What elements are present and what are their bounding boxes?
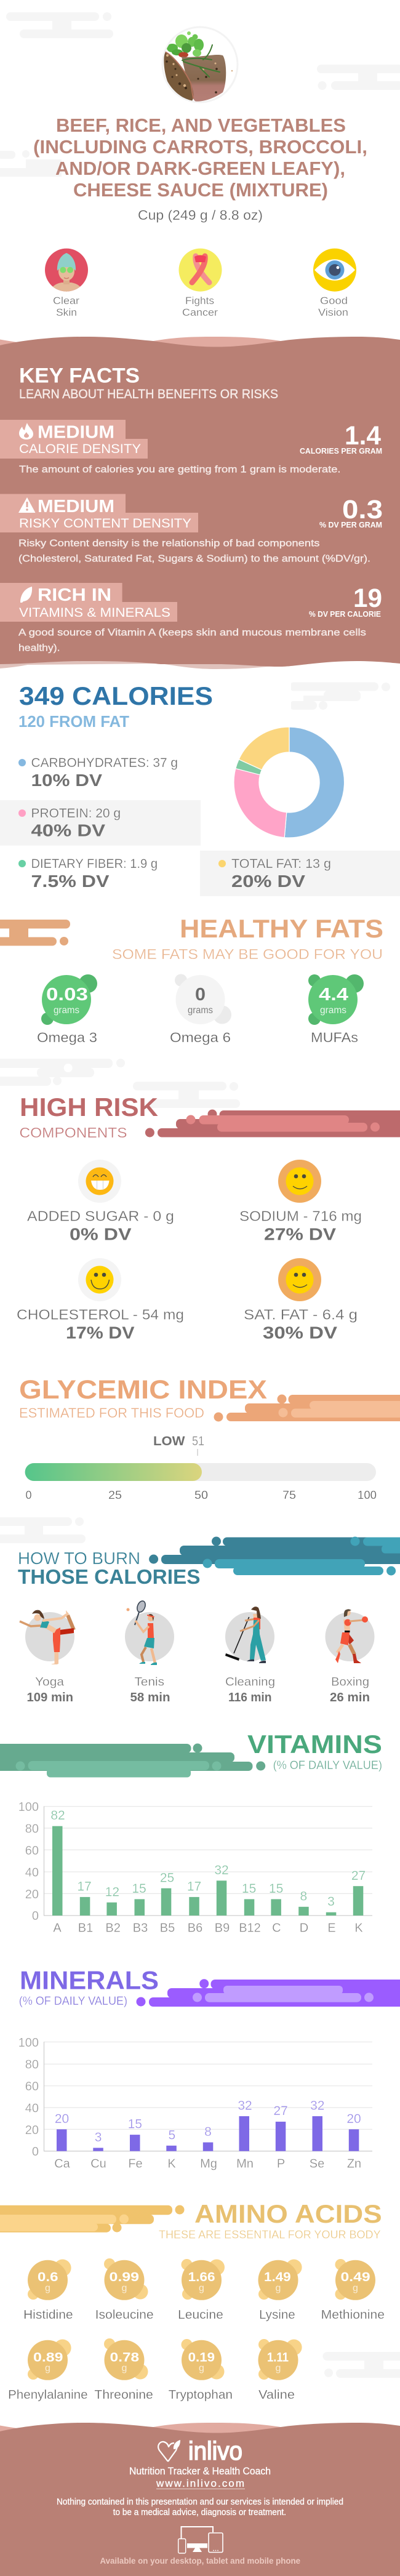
glycemic index gauge: LOW: [153, 1434, 185, 1448]
fights cancer label: [182, 295, 218, 318]
bar chart: minerals: 40: [25, 2101, 39, 2115]
amino acid: tryptophan: 0.19: [188, 2350, 215, 2364]
fat: omega 3: [37, 974, 97, 1045]
bar chart: minerals: 100: [18, 2036, 39, 2050]
macro: total fat: 20% DV: [231, 872, 305, 891]
bar chart: vitamins: 15: [269, 1882, 283, 1896]
glycemic index gauge: 100: [358, 1489, 377, 1501]
amino acid: phenylalanine: [8, 2339, 88, 2402]
title: AND/OR DARK-GREEN LEAFY),: [55, 158, 345, 179]
risk: cholesterol: CHOLESTEROL - 54 mg: [17, 1307, 184, 1323]
bar chart: vitamins: B12: [239, 1922, 261, 1935]
panel: key facts: [0, 337, 400, 669]
good vision label: [318, 295, 348, 318]
heading: high risk components: HIGH RISK: [20, 1093, 158, 1121]
bar chart: vitamins: B6: [188, 1922, 202, 1935]
activity label: yoga: Yoga: [35, 1676, 64, 1689]
fat: mufas: MUFAs: [311, 1030, 358, 1045]
bar chart: minerals: 80: [25, 2058, 39, 2072]
risk: sodium: SODIUM - 716 mg: [239, 1208, 362, 1224]
donut chart: macronutrients: [234, 727, 345, 838]
key facts heading: KEY FACTS: [19, 364, 140, 387]
logo wordmark: inlivo: [188, 2436, 242, 2465]
bar chart: vitamins: E: [327, 1922, 336, 1935]
macro: protein: 40% DV: [31, 821, 105, 840]
glycemic index gauge: [25, 1434, 377, 1501]
bar chart: minerals: P: [277, 2157, 285, 2171]
fact: risky content density: [0, 494, 383, 564]
bar chart: minerals: 60: [25, 2080, 39, 2093]
bar chart: minerals: 15: [128, 2117, 142, 2131]
heading: healthy fats: HEALTHY FATS: [180, 914, 383, 943]
bar chart: vitamins: 80: [25, 1822, 39, 1836]
amino acid: phenylalanine: 0.89: [33, 2350, 63, 2364]
bar chart: vitamins: 32: [214, 1863, 229, 1877]
amino acid: phenylalanine: Phenylalanine: [8, 2388, 88, 2402]
bar chart: vitamins: 60: [25, 1844, 39, 1858]
glycemic index gauge: 25: [108, 1489, 122, 1501]
background clouds: header: [0, 12, 400, 177]
fact: calorie density: The amount of calories you are getting from 1 gram is moderate.: [19, 464, 341, 475]
bar chart: vitamins: 40: [25, 1866, 39, 1880]
bar chart: minerals: 20: [346, 2112, 361, 2126]
amino acid: leucine: Leucine: [178, 2308, 223, 2322]
activity label: yoga: 109 min: [27, 1691, 73, 1704]
good vision label: Good: [320, 295, 348, 307]
bar chart: vitamins: B3: [133, 1922, 148, 1935]
glycemic index gauge: 0: [26, 1489, 32, 1501]
bar chart: vitamins: 17: [77, 1880, 92, 1893]
amino acid: isoleucine: [95, 2258, 154, 2322]
glycemic index gauge: 51: [192, 1434, 204, 1448]
heading: vitamins: [247, 1730, 382, 1772]
heading: calories: 120 FROM FAT: [18, 712, 129, 731]
bar chart: minerals: 20: [55, 2112, 69, 2126]
risk: sodium: [239, 1160, 362, 1244]
heading: how to burn those calories: HOW TO BURN: [18, 1549, 140, 1568]
amino acid: isoleucine: 0.99: [110, 2270, 139, 2284]
bar chart: vitamins: B1: [78, 1922, 93, 1935]
title: (INCLUDING CARROTS, BROCCOLI,: [33, 136, 367, 158]
fat: omega 6: 0: [195, 985, 206, 1005]
bar chart: vitamins: B5: [160, 1922, 175, 1935]
amino acid: lysine: [258, 2259, 302, 2322]
activity label: boxing: [330, 1676, 370, 1704]
heading: high risk components: [20, 1093, 158, 1141]
heading: healthy fats: [112, 914, 383, 962]
bar chart: vitamins: [18, 1800, 372, 1935]
clear skin label: [53, 295, 79, 318]
bar chart: minerals: Zn: [347, 2157, 361, 2171]
background cloud: calories: [289, 682, 390, 710]
amino acid: valine: g: [276, 2363, 281, 2373]
title: CHEESE SAUCE (MIXTURE): [73, 179, 328, 201]
fights cancer label: Fights: [185, 295, 214, 307]
disclaimer: to be a medical advice, diagnosis or treatment.: [113, 2508, 286, 2518]
activity label: tennis: Tenis: [134, 1676, 164, 1689]
amino acid: leucine: g: [199, 2283, 204, 2293]
heading: glycemic index: [19, 1375, 267, 1421]
amino acid: threonine: g: [122, 2363, 127, 2373]
bar chart: vitamins: D: [300, 1922, 308, 1935]
amino acid: threonine: [94, 2338, 153, 2402]
fact: rich in vitamins and minerals: VITAMINS & MINERALS: [19, 606, 170, 620]
activity label: cleaning: 116 min: [228, 1691, 272, 1704]
fact: rich in vitamins and minerals: % DV PER CALORIE: [309, 609, 381, 619]
bar chart: minerals: 27: [273, 2104, 288, 2118]
heading: minerals: [19, 1966, 159, 2008]
website link: www.inlivo.com: [156, 2478, 244, 2489]
key facts subheading: LEARN ABOUT HEALTH BENEFITS OR RISKS: [19, 387, 278, 401]
amino acid: threonine: 0.78: [110, 2350, 139, 2364]
fat: omega 6: [170, 974, 231, 1045]
amino acid: histidine: 0.6: [38, 2270, 58, 2284]
bar chart: vitamins: 27: [351, 1869, 366, 1883]
amino acid: methionine: [321, 2259, 385, 2322]
availability note: Available on your desktop, tablet and mobile phone: [100, 2556, 300, 2566]
macro: carbohydrates: CARBOHYDRATES: 37 g: [31, 756, 178, 770]
bar chart: vitamins: B2: [105, 1922, 121, 1935]
activity label: boxing: Boxing: [331, 1676, 369, 1689]
fact: risky content density: Risky Content density is the relationship of bad components: [18, 538, 320, 549]
heading: how to burn those calories: [18, 1549, 201, 1588]
macro: dietary fiber: DIETARY FIBER: 1.9 g: [31, 857, 158, 871]
fat: omega 6: Omega 6: [170, 1030, 231, 1045]
title: [33, 114, 367, 201]
bar chart: vitamins: K: [354, 1922, 363, 1935]
background clouds: high risk: [0, 1059, 240, 1108]
risk: cholesterol: [17, 1258, 184, 1342]
fact: rich in vitamins and minerals: RICH IN: [38, 585, 111, 605]
fact: risky content density: % DV PER GRAM: [319, 520, 382, 529]
icon: fights cancer: [178, 249, 222, 292]
amino acid: tryptophan: g: [199, 2363, 204, 2373]
risk: cholesterol: 17% DV: [66, 1323, 135, 1342]
risk: saturated fat: [244, 1258, 358, 1342]
clear skin label: Clear: [53, 295, 79, 307]
macro: protein: PROTEIN: 20 g: [31, 806, 121, 821]
heading: glycemic index: GLYCEMIC INDEX: [19, 1375, 267, 1405]
fact: risky content density: MEDIUM: [38, 497, 114, 516]
amino acid: histidine: g: [45, 2283, 50, 2293]
disclaimer: Nothing contained in this presentation and our services is intended or implied: [57, 2497, 343, 2507]
bar chart: vitamins: 12: [105, 1885, 119, 1900]
bar chart: minerals: Mg: [200, 2157, 217, 2171]
risk: added sugar: [27, 1160, 174, 1244]
amino acid: valine: 1.11: [267, 2350, 289, 2364]
amino acid: isoleucine: g: [122, 2283, 127, 2293]
decoration: healthy fats: [0, 920, 70, 945]
amino acid: lysine: 1.49: [264, 2270, 291, 2284]
macro: carbohydrates: [18, 756, 178, 790]
macro: dietary fiber: [18, 857, 158, 891]
amino acid: methionine: 0.49: [341, 2270, 370, 2284]
glycemic index gauge: 75: [282, 1489, 296, 1501]
macro: total fat: [200, 851, 400, 896]
fact: calorie density: [0, 420, 382, 475]
fat: omega 3: 0.03: [46, 985, 88, 1005]
fat: omega 3: Omega 3: [37, 1030, 97, 1045]
fact: risky content density: RISKY CONTENT DENSITY: [19, 516, 191, 531]
icon: devices: [178, 2527, 223, 2553]
heading: healthy fats: SOME FATS MAY BE GOOD FOR YOU: [112, 946, 383, 962]
tagline: Nutrition Tracker & Health Coach: [129, 2465, 271, 2477]
fact: rich in vitamins and minerals: 19: [353, 584, 382, 613]
bar chart: minerals: 3: [95, 2130, 102, 2145]
bar chart: vitamins: 15: [242, 1882, 256, 1896]
risk: saturated fat: 30% DV: [263, 1323, 337, 1342]
footer panel: [0, 2423, 400, 2576]
heading: minerals: (% OF DAILY VALUE): [19, 1995, 127, 2008]
bar chart: minerals: [18, 2036, 372, 2171]
background cloud: amino acids: [322, 2352, 400, 2378]
good vision label: Vision: [318, 307, 348, 318]
bar chart: minerals: 20: [25, 2124, 39, 2137]
bar chart: vitamins: 25: [160, 1871, 174, 1885]
activity: tennis: [125, 1600, 174, 1665]
heading: amino acids: THESE ARE ESSENTIAL FOR YOUR BODY: [159, 2229, 381, 2241]
amino acid: threonine: Threonine: [94, 2388, 153, 2402]
fact: rich in vitamins and minerals: [0, 583, 382, 654]
heading: vitamins: VITAMINS: [247, 1730, 382, 1759]
fact: rich in vitamins and minerals: A good source of Vitamin A (keeps skin and mucous membrane cells: [18, 628, 366, 638]
bar chart: minerals: Cu: [90, 2157, 106, 2171]
fat: mufas: [308, 974, 364, 1045]
decoration: glycemic index: [214, 1395, 400, 1422]
fact: risky content density: (Cholesterol, Saturated Fat, Sugars & Sodium) to the amount (%DV/gr).: [18, 554, 370, 564]
heading: vitamins: (% OF DAILY VALUE): [273, 1759, 382, 1772]
amino acid: leucine: [178, 2259, 225, 2322]
bar chart: minerals: Ca: [54, 2157, 71, 2171]
bar chart: vitamins: A: [53, 1922, 62, 1935]
heading: amino acids: AMINO ACIDS: [194, 2199, 382, 2228]
heading: calories: 349 CALORIES: [19, 681, 213, 710]
amino acid: leucine: 1.66: [188, 2270, 215, 2284]
bar chart: minerals: Fe: [128, 2157, 143, 2171]
heading: high risk components: COMPONENTS: [20, 1125, 127, 1141]
food photo: steak with greens: [162, 27, 238, 102]
bar chart: minerals: K: [167, 2157, 176, 2171]
bar chart: vitamins: 0: [32, 1909, 39, 1923]
decoration: burn calories: [149, 1536, 400, 1576]
fat: omega 6: grams: [188, 1005, 213, 1016]
risk: added sugar: 0% DV: [70, 1225, 132, 1244]
title: BEEF, RICE, AND VEGETABLES: [56, 114, 346, 136]
bar chart: vitamins: 17: [187, 1880, 201, 1893]
macro: protein: [0, 800, 201, 846]
glycemic index gauge: 50: [194, 1489, 208, 1501]
clear skin label: Skin: [56, 307, 77, 318]
activity label: cleaning: Cleaning: [225, 1676, 275, 1689]
decoration: amino acids: [0, 2205, 185, 2233]
disclaimer: [57, 2497, 343, 2518]
icon: good vision: [313, 249, 356, 292]
heading: amino acids: [159, 2199, 382, 2241]
serving size: Cup (249 g / 8.8 oz): [138, 207, 263, 223]
decoration: vitamins: [0, 1743, 265, 1778]
bar chart: minerals: 32: [238, 2099, 252, 2113]
decoration: minerals: [137, 1979, 400, 2007]
bar chart: vitamins: 82: [50, 1808, 65, 1823]
amino acid: methionine: g: [353, 2283, 358, 2293]
bar chart: vitamins: 15: [132, 1882, 146, 1896]
amino acid: isoleucine: Isoleucine: [95, 2308, 154, 2322]
bar chart: minerals: Se: [310, 2157, 324, 2171]
bar chart: minerals: 8: [204, 2125, 212, 2139]
amino acid: valine: Valine: [258, 2388, 295, 2402]
amino acid: histidine: [23, 2259, 73, 2322]
fat: mufas: 4.4: [319, 985, 348, 1005]
bar chart: vitamins: 3: [327, 1895, 335, 1909]
activity label: cleaning: [225, 1676, 275, 1704]
activity: yoga: [20, 1610, 74, 1664]
macro: carbohydrates: 10% DV: [31, 771, 102, 790]
fact: calorie density: MEDIUM: [38, 422, 114, 442]
bar chart: vitamins: C: [272, 1922, 281, 1935]
heading: minerals: MINERALS: [20, 1966, 159, 1995]
fat: omega 3: grams: [54, 1005, 79, 1016]
fact: calorie density: 1.4: [345, 421, 381, 451]
fights cancer label: Cancer: [182, 307, 218, 318]
bar chart: minerals: Mn: [236, 2157, 254, 2171]
amino acid: phenylalanine: g: [45, 2363, 50, 2373]
heading: how to burn those calories: THOSE CALORIES: [18, 1565, 201, 1588]
amino acid: lysine: Lysine: [259, 2308, 295, 2322]
bar chart: vitamins: 8: [300, 1890, 307, 1903]
amino acid: lysine: g: [276, 2283, 281, 2293]
bar chart: minerals: 0: [32, 2145, 39, 2159]
icon: clear skin: [45, 249, 88, 292]
activity label: tennis: [130, 1676, 170, 1704]
amino acid: histidine: Histidine: [23, 2308, 73, 2322]
activity label: boxing: 26 min: [330, 1691, 370, 1704]
fact: rich in vitamins and minerals: healthy).: [18, 643, 60, 654]
fat: mufas: grams: [320, 1005, 346, 1016]
amino acid: tryptophan: Tryptophan: [169, 2388, 233, 2402]
risk: added sugar: ADDED SUGAR - 0 g: [27, 1208, 174, 1224]
activity: cleaning: [225, 1607, 274, 1663]
heading: calories: [18, 681, 213, 731]
fact: calorie density: CALORIE DENSITY: [19, 442, 141, 456]
bar chart: vitamins: 100: [18, 1800, 39, 1814]
amino acid: tryptophan: [169, 2339, 233, 2402]
background cloud: burn calories: [0, 1517, 86, 1543]
bar chart: vitamins: 20: [25, 1888, 39, 1901]
heading: glycemic index: ESTIMATED FOR THIS FOOD: [19, 1405, 204, 1421]
amino acid: valine: [258, 2339, 302, 2402]
macro: dietary fiber: 7.5% DV: [31, 872, 110, 891]
fact: risky content density: 0.3: [342, 495, 383, 524]
fact: calorie density: CALORIES PER GRAM: [300, 446, 382, 455]
macro: total fat: TOTAL FAT: 13 g: [231, 857, 331, 871]
bar chart: minerals: 5: [169, 2129, 175, 2142]
activity label: yoga: [27, 1676, 73, 1704]
activity: boxing: [325, 1609, 374, 1663]
activity label: tennis: 58 min: [130, 1691, 170, 1704]
bar chart: vitamins: B9: [215, 1922, 230, 1935]
risk: saturated fat: SAT. FAT - 6.4 g: [244, 1307, 358, 1323]
amino acid: methionine: Methionine: [321, 2308, 385, 2322]
bar chart: minerals: 32: [310, 2099, 324, 2113]
icon: inlivo heart logo: [158, 2440, 180, 2462]
risk: sodium: 27% DV: [264, 1225, 336, 1244]
decoration: high risk: [145, 1109, 400, 1138]
